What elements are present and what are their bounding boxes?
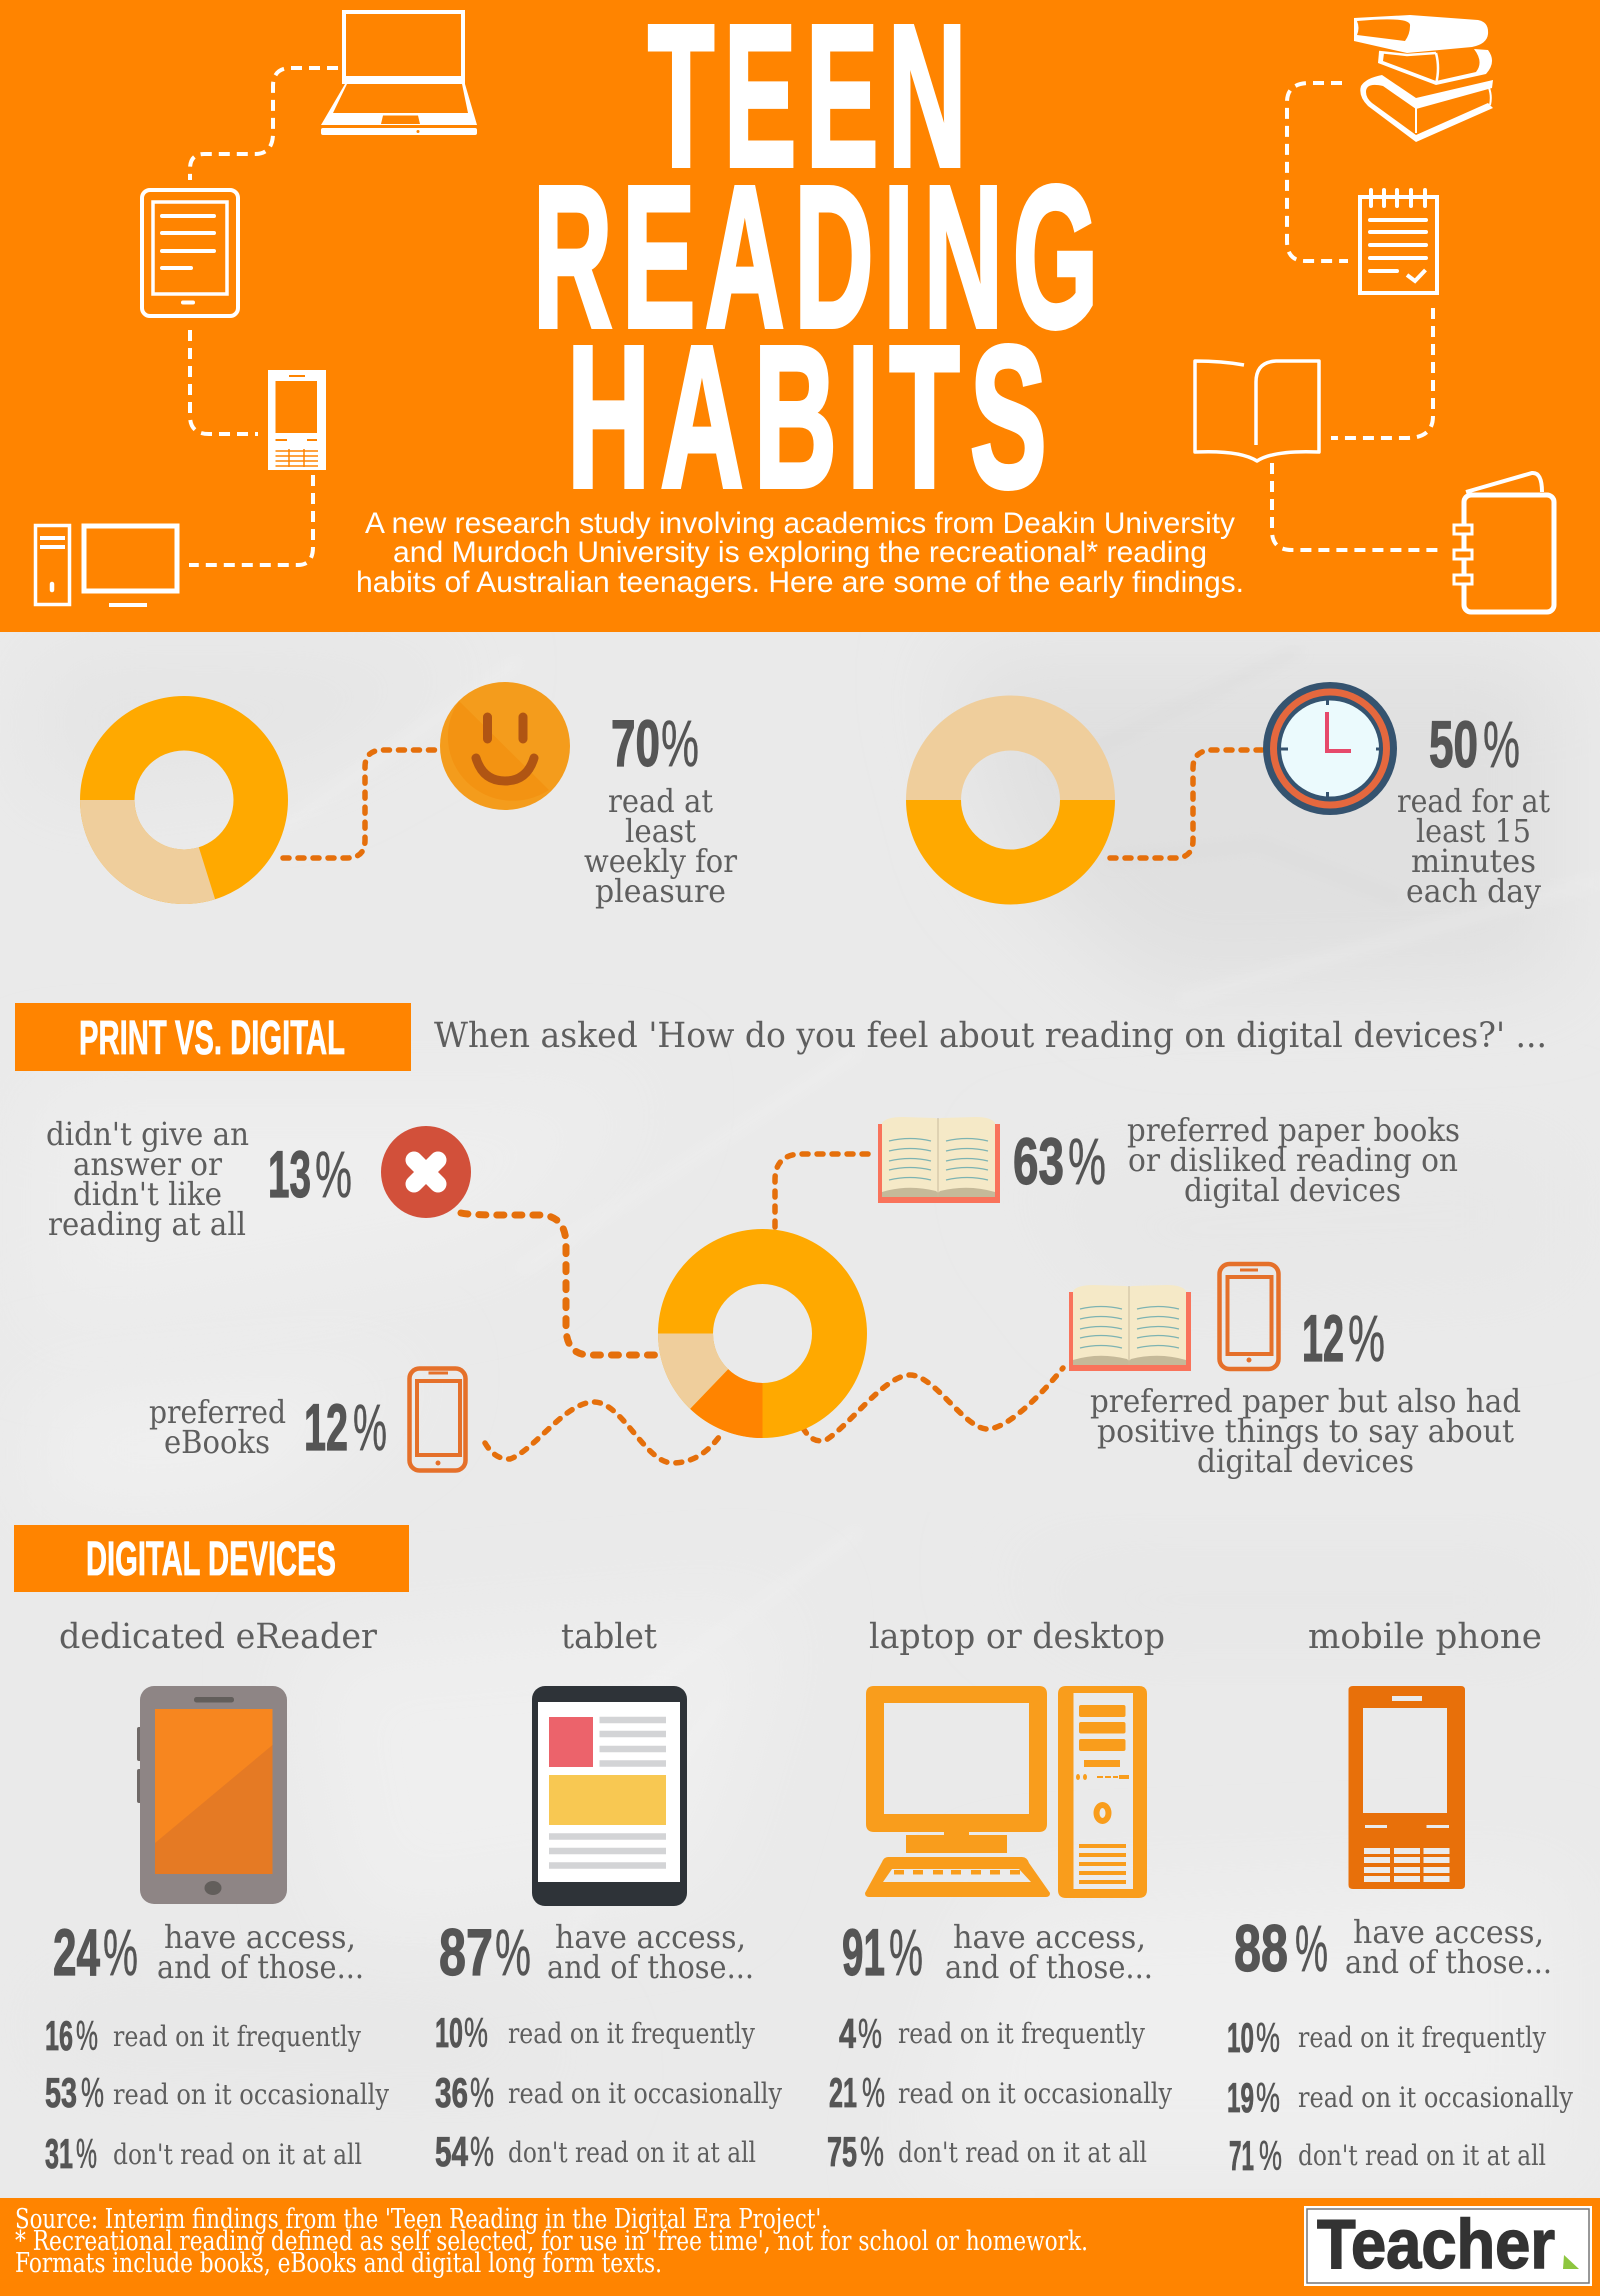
text: read for at least 15 minutes each day: read for at [1397,782,1550,820]
title: Teen Reading Habits: READING [533,144,1108,370]
callout: 12 percent preferred paper with positive digital views: positive things to say about [1097,1412,1514,1450]
stat: 91 percent have access: and of those... [945,1948,1153,1986]
row: not at all: don't read on it at all [898,2136,1147,2169]
callout: 63 percent preferred paper: % [1068,1124,1106,1198]
stat: 24 percent have access: 24 [53,1915,100,1989]
row: not at all [45,2130,362,2177]
callout: 12 percent preferred eBooks: eBooks [164,1423,270,1461]
stat: 88 percent have access [1234,1911,1552,1985]
callout: 63 percent preferred paper: 63 [1013,1124,1064,1198]
row: not at all: % [470,2128,494,2175]
text: source notes: Formats include books, eBooks and digital long form texts. [15,2248,662,2279]
callout: 12 percent preferred eBooks: preferred [149,1393,286,1431]
stat: 87 percent have access: % [495,1915,531,1989]
stat: 24 percent have access: and of those... [157,1948,364,1986]
row: frequently [1227,2014,1546,2061]
callout: 13 percent no answer: didn't give an [46,1115,249,1153]
text: survey question: When asked 'How do you feel about reading on digital devices?' ... [434,1016,1547,1056]
connector: notepad to open book [1331,308,1433,438]
panel: weekly pleasure reading [80,682,738,910]
row: frequently: 4 [839,2010,856,2057]
row: not at all: % [860,2128,884,2175]
icon: tablet device [532,1686,687,1906]
row: occasionally: 36 [435,2069,468,2116]
connector: e-reader to phone [190,330,258,434]
icon: notebook [1454,473,1554,612]
chart: donut 50 percent [906,696,1115,904]
callout: 13 percent no answer: didn't like [73,1175,222,1213]
text: read for at least 15 minutes each day: least 15 [1416,812,1531,850]
connector: donut to smiley [283,750,440,858]
icon: desktop computer [36,526,177,605]
text: read for at least 15 minutes each day: minutes [1411,842,1536,880]
row: not at all: 75 [827,2128,857,2175]
icon: mobile phone device [1348,1686,1465,1889]
stat: 91 percent have access [842,1915,1153,1989]
stat: 87 percent have access: 87 [439,1915,493,1989]
row: not at all [435,2128,756,2175]
heading: print vs digital [15,1003,411,1071]
panel: laptop or desktop [827,1617,1172,2175]
panel: print vs digital chart [46,1111,1521,1480]
title: Teen Reading Habits [533,0,1108,530]
connector: 13 percent to donut [461,1213,658,1355]
icon: phone outline [1220,1264,1278,1369]
callout: 12 percent preferred paper with positive digital views: preferred paper but also had [1090,1382,1521,1420]
paper background [0,632,1600,2202]
row: frequently: % [464,2009,488,2056]
row: not at all: 54 [435,2128,468,2175]
icon: stack of books [1354,15,1493,142]
row: not at all: 71 [1229,2132,1254,2179]
stat: 91 percent have access: 91 [842,1915,885,1989]
logo: Teacher: Teacher [1317,2205,1555,2283]
row: occasionally: % [81,2069,104,2116]
row: occasionally [45,2069,389,2116]
stat: 88 percent have access: % [1295,1911,1328,1985]
callout: 12 percent preferred paper with positive digital views: digital devices [1197,1442,1414,1480]
callout: 13 percent no answer: % [315,1137,352,1211]
text: read at least weekly for pleasure: weekly for [584,842,738,880]
heading: print vs digital: PRINT VS. DIGITAL [79,1012,345,1065]
stat: 87 percent have access: and of those... [547,1948,754,1986]
connector: laptop to e-reader [190,68,338,180]
stat: 24 percent have access: have access, [164,1918,356,1956]
row: frequently: 10 [1227,2014,1254,2061]
row: frequently: read on it frequently [113,2020,361,2053]
callout: 12 percent preferred eBooks: 12 [304,1390,348,1464]
row: not at all: % [76,2130,97,2177]
icon: desktop computer [865,1686,1147,1898]
label: dedicated eReader: dedicated eReader [59,1617,377,1657]
stat: 88 percent have access: have access, [1353,1913,1544,1951]
intro text: habits of Australian teenagers. Here are some of the early findings. [356,566,1244,599]
text: source notes: Source: Interim findings from the 'Teen Reading in the Digital Era Project'. [15,2204,828,2235]
icon: open book [878,1117,1000,1203]
icon: eReader device [137,1686,287,1904]
row: frequently [839,2010,1145,2057]
stat: 24 percent have access: % [103,1915,138,1989]
text: source notes [15,2204,1088,2279]
stat: 50 percent: 50 [1429,707,1478,781]
row: frequently: read on it frequently [508,2017,755,2050]
row: occasionally: read on it occasionally [113,2078,389,2111]
row: occasionally: read on it occasionally [508,2077,782,2110]
callout: 63 percent preferred paper: preferred paper books [1127,1111,1460,1149]
connector: books to notepad [1287,83,1348,261]
stat: 87 percent have access [439,1915,754,1989]
connector: donut to 63 percent [775,1154,877,1227]
footer band [0,2198,1600,2296]
row: not at all: don't read on it at all [113,2138,362,2171]
row: occasionally: % [470,2069,494,2116]
connector: donut to eBooks [485,1402,722,1463]
heading: digital devices [14,1525,409,1592]
callout: 63 percent preferred paper: digital devices [1184,1171,1401,1209]
row: frequently: read on it frequently [1298,2021,1546,2054]
connector: donut to clock [1110,750,1262,858]
row: frequently [45,2012,361,2059]
callout: 13 percent no answer: reading at all [48,1205,246,1243]
row: occasionally: read on it occasionally [898,2077,1172,2110]
connector: open book to notebook [1272,463,1438,550]
text: source notes: * Recreational reading defined as self selected, for use in 'free time', not for school or homework. [15,2226,1088,2257]
intro text [356,507,1244,599]
callout: 13 percent no answer [46,1115,471,1243]
callout: 13 percent no answer: 13 [268,1137,311,1211]
text: read at least weekly for pleasure: pleasure [595,872,726,910]
row: frequently: 10 [435,2009,463,2056]
row: not at all: don't read on it at all [508,2136,756,2169]
icon: open book outline [1195,361,1319,461]
chart: central donut [658,1229,867,1438]
row: not at all: 31 [45,2130,73,2177]
label: mobile phone: mobile phone [1308,1617,1542,1657]
row: occasionally [829,2069,1172,2116]
panel: tablet [435,1617,782,2175]
connector: phone to desktop [189,475,313,565]
callout: 12 percent preferred paper with positive digital views [1069,1264,1521,1480]
label: laptop or desktop: laptop or desktop [869,1617,1165,1657]
text: read for at least 15 minutes each day [1397,782,1550,910]
icon: mobile phone [268,370,326,470]
row: frequently: % [1256,2014,1280,2061]
callout: 12 percent preferred paper with positive digital views: % [1348,1301,1385,1375]
stat: 91 percent have access: have access, [953,1918,1146,1956]
intro text: and Murdoch University is exploring the recreational* reading [393,536,1207,569]
row: not at all [1229,2132,1546,2179]
stat: 88 percent have access: and of those... [1345,1943,1552,1981]
icon: red cross [381,1126,471,1218]
icon: notepad [1360,190,1437,293]
row: occasionally: % [1256,2074,1280,2121]
stat: 88 percent have access: 88 [1234,1911,1288,1985]
row: occasionally: 21 [829,2069,857,2116]
panel: dedicated eReader [45,1617,389,2177]
icon: phone outline [410,1368,466,1470]
icon: clock [1263,682,1397,815]
text: read at least weekly for pleasure [584,782,738,910]
callout: 12 percent preferred eBooks [149,1368,466,1470]
row: frequently [435,2009,755,2056]
icon: laptop [321,12,477,135]
row: occasionally [435,2069,782,2116]
chart: donut 70 percent [80,696,288,904]
icon: e-reader [142,190,238,316]
panel: daily reading time [906,682,1550,910]
callout: 63 percent preferred paper [878,1111,1460,1209]
title: Teen Reading Habits: HABITS [567,304,1057,530]
row: occasionally [1227,2074,1573,2121]
row: occasionally: % [862,2069,885,2116]
text: read for at least 15 minutes each day: each day [1406,872,1541,910]
icon: smiley [440,682,570,810]
callout: 13 percent no answer: answer or [73,1145,223,1183]
stat: 70 percent: 70 [611,706,660,780]
stat: 50 percent: % [1483,707,1520,781]
stat: 24 percent have access [53,1915,364,1989]
row: not at all: don't read on it at all [1298,2139,1546,2172]
row: occasionally: 53 [45,2069,77,2116]
icon: open book [1069,1285,1191,1371]
row: frequently: read on it frequently [898,2017,1145,2050]
header band [0,0,1600,632]
row: occasionally: 19 [1227,2074,1254,2121]
callout: 12 percent preferred paper with positive digital views: 12 [1302,1301,1344,1375]
row: frequently: 16 [45,2012,73,2059]
text: read at least weekly for pleasure: read at [608,782,713,820]
stat: 70 percent: % [661,706,699,780]
connector: donut to mixed preference [803,1368,1063,1441]
callout: 63 percent preferred paper: or disliked reading on [1128,1141,1458,1179]
row: frequently: % [858,2010,882,2057]
row: frequently: % [76,2012,98,2059]
row: not at all: % [1259,2132,1282,2179]
row: not at all [827,2128,1147,2175]
text: read at least weekly for pleasure: least [625,812,696,850]
heading: digital devices: DIGITAL DEVICES [86,1533,336,1586]
panel: mobile phone [1227,1617,1573,2179]
callout: 12 percent preferred eBooks: % [353,1390,387,1464]
label: tablet: tablet [561,1617,657,1657]
stat: 91 percent have access: % [889,1915,923,1989]
stat: 87 percent have access: have access, [555,1918,746,1956]
intro text: A new research study involving academics from Deakin University [365,507,1235,540]
